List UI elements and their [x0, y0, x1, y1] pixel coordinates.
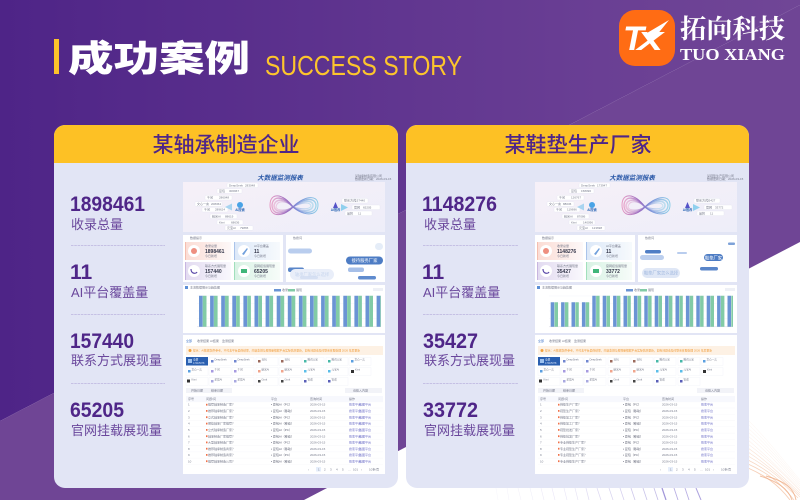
dashboard screenshot: insole manufacturer: 元宝AI	[579, 225, 588, 230]
metric: total indexed: 收录总量	[71, 217, 123, 232]
word cloud: 接待服务厂家	[352, 257, 378, 264]
dashboard screenshot: insole manufacturer: 11	[710, 211, 713, 215]
dashboard screenshot: bearing manufacturer: 某轴承制造有限公司	[355, 173, 382, 178]
results table names: 鞋垫加工厂家？	[560, 414, 581, 419]
results table names	[208, 402, 371, 463]
results table names: 轴承制造厂家推荐？	[208, 433, 235, 438]
dashboard screenshot: insole manufacturer: 联系方式	[696, 198, 708, 203]
results table names: 专业鞋垫生产厂家？	[560, 446, 587, 451]
dashboard screenshot: bearing manufacturer: 157440	[205, 269, 222, 275]
dashboard screenshot: bearing manufacturer: 千问	[204, 207, 210, 212]
dashboard screenshot: insole manufacturer: 126767	[571, 196, 581, 200]
metric: website impressions	[70, 399, 162, 438]
dashboard screenshot: insole manufacturer: 某鞋垫生产有限公司	[707, 173, 734, 178]
dashboard screenshot: insole manufacturer: 119696	[567, 208, 577, 212]
dashboard screenshot: bearing manufacturer: 65205	[363, 205, 372, 209]
logo icon	[619, 10, 675, 66]
dashboard screenshot: bearing manufacturer: 286048	[219, 196, 229, 200]
results table names: ▪ 豆包AI（PC）	[271, 452, 292, 457]
heading: title	[54, 38, 462, 81]
results table names	[560, 402, 643, 463]
dashboard screenshot: bearing manufacturer: 纳米AI	[212, 213, 221, 218]
results table names: 鞋垫批发厂家？	[560, 433, 581, 438]
dashboard screenshot: bearing manufacturer: 官网	[354, 204, 360, 209]
logo latin name: TUO XIANG	[680, 45, 785, 64]
metric: contact impressions: 联系方式展现量	[424, 353, 515, 368]
results table names: ▪ 豆包AI（移动）	[271, 433, 294, 438]
dashboard screenshot: insole manufacturer: 千问	[559, 195, 565, 200]
dashboard screenshot: bearing manufacturer: 208364	[211, 202, 221, 206]
results table names: 哪些轴承厂家推荐？	[208, 421, 235, 426]
results table names: 立式轴承制造厂家？	[208, 414, 235, 419]
dashboard screenshot: insole manufacturer: 33772	[715, 205, 724, 209]
metric: total indexed: 1898461	[70, 193, 145, 216]
results table names: ▪ 豆包AI（移动）	[271, 421, 294, 426]
metric: AI platforms: AI平台覆盖量	[71, 285, 148, 300]
metric: AI platforms	[422, 261, 500, 300]
results table names: 截图平台	[359, 421, 371, 426]
dashboard screenshot: bearing manufacturer: 大数据监测报表	[257, 174, 304, 182]
results table names: 推荐轴承制造商家？	[208, 446, 235, 451]
results table names: ▪ 豆包AI（移动）	[271, 446, 294, 451]
panel heading: 某轴承制造企业	[152, 134, 300, 157]
results table names: ▪ 豆包（PC）	[623, 440, 641, 444]
dashboard screenshot: insole manufacturer: 品牌	[699, 210, 705, 215]
dashboard screenshot: insole manufacturer: 173947	[597, 183, 607, 187]
dashboard screenshot: bearing manufacturer: 品牌	[347, 210, 353, 215]
results table names: 专业鞋垫生产厂家？	[560, 452, 587, 457]
decoration: lavender fan lines	[496, 488, 701, 500]
word cloud: 鞋垫厂家	[705, 254, 723, 261]
results table names: 专业鞋垫生产厂家？	[560, 440, 587, 444]
dashboard screenshot: insole manufacturer: 33772	[606, 269, 620, 275]
metric: AI platforms: 11	[422, 261, 445, 284]
results table names: 专业鞋垫生产厂家？	[560, 458, 587, 463]
results table names: ▪ 豆包（移动）	[623, 433, 643, 438]
results table names: ▪ 豆包（移动）	[623, 458, 643, 463]
dashboard screenshot: insole manufacturer: 1148276	[557, 249, 576, 255]
title: English: SUCCESS STORY	[265, 50, 462, 81]
title: Chinese: 成功案例	[68, 38, 250, 79]
metric: contact impressions: 157440	[70, 330, 134, 353]
metric: AI platforms	[70, 261, 148, 300]
results table names: 推荐轴承制造公司？	[208, 458, 235, 463]
metric: website impressions: 65205	[70, 399, 124, 422]
results table names: ▪ 豆包AI（PC）	[271, 402, 292, 407]
word cloud	[640, 242, 735, 278]
results table names: 截图平台	[359, 452, 371, 457]
metric: contact impressions: 联系方式展现量	[71, 353, 162, 368]
dashboard screenshot: insole manufacturer: 87086	[577, 214, 586, 218]
results table names: 截图平台	[359, 408, 371, 413]
results table names: 推荐轴承制造厂家？	[208, 402, 235, 407]
dashboard screenshot: insole manufacturer: 11	[606, 249, 612, 255]
dashboard screenshot: insole manufacturer: 140096	[583, 220, 593, 224]
dashboard screenshot: bearing manufacturer: 79865	[240, 226, 249, 230]
metric: total indexed: 收录总量	[424, 217, 476, 232]
results table names: 鞋垫批发厂家？	[560, 427, 581, 432]
word cloud	[288, 243, 383, 280]
decoration: orange flowing curves	[748, 420, 800, 500]
results table names: 大型轴承制造厂家？	[208, 440, 235, 444]
dashboard screenshot: bearing manufacturer: Kimi	[219, 220, 225, 224]
dashboard screenshot: insole manufacturer: 大数据监测报表	[609, 174, 656, 182]
dashboard screenshot: insole manufacturer: 文心一言	[549, 201, 561, 206]
results table names: 截图平台	[359, 458, 371, 463]
dashboard screenshot: insole manufacturer	[535, 173, 744, 474]
dashboard screenshot: insole manufacturer: 123698	[592, 226, 602, 230]
results table names: ▪ 豆包（移动）	[623, 421, 643, 426]
metric: contact impressions: 35427	[423, 330, 478, 353]
dashboard screenshot: bearing manufacturer: 11	[254, 249, 260, 255]
dashboard screenshot: insole manufacturer: DeepSeek	[581, 183, 596, 187]
results table names: 鞋垫加工厂家？	[560, 421, 581, 426]
dashboard screenshot: bearing manufacturer: 元宝AI	[227, 225, 236, 230]
logo icon: X	[634, 26, 665, 56]
metric: contact impressions	[423, 330, 515, 368]
panel heading: 某鞋垫生产厂家	[504, 134, 652, 157]
metric: total indexed	[70, 193, 145, 232]
dashboard screenshot: insole manufacturer: 35427	[557, 269, 571, 275]
metric: total indexed: 1148276	[422, 193, 497, 216]
results table names: ▪ 豆包（移动）	[623, 408, 643, 413]
results table names: ▪ 豆包AI（PC）	[271, 427, 292, 432]
dashboard screenshot: bearing manufacturer: 283048	[245, 183, 255, 187]
results table names: ▪ 豆包（PC）	[623, 427, 641, 432]
dashboard screenshot: bearing manufacturer: 豆包	[219, 188, 225, 193]
results table names: ▪ 豆包AI（PC）	[271, 414, 292, 419]
logo wordmark: 拓向科技	[680, 14, 785, 44]
results table names: 截图平台	[359, 414, 371, 419]
dashboard screenshot: insole manufacturer: 88036	[563, 202, 572, 206]
results table names: 立式轴承制造厂家？	[208, 427, 235, 432]
bar chart	[551, 311, 733, 314]
metric: website impressions: 官网挂载展现量	[424, 423, 515, 438]
dashboard screenshot: insole manufacturer: 千问	[556, 207, 562, 212]
metric: AI platforms: 11	[70, 261, 93, 284]
metric: contact impressions	[70, 330, 162, 368]
dashboard screenshot: bearing manufacturer	[183, 173, 392, 474]
dashboard screenshot: bearing manufacturer: 数据更新日期：2026-03-15	[355, 176, 392, 181]
dashboard screenshot: bearing manufacturer: 289624	[215, 208, 225, 212]
dashboard screenshot: insole manufacturer: Kimi	[571, 220, 577, 224]
results table names: 截图平台	[359, 402, 371, 407]
word cloud: 鞋垫厂家怎么选择	[644, 270, 679, 276]
dashboard screenshot: bearing manufacturer: 11	[358, 211, 361, 215]
results table names: ▪ 豆包（PC）	[623, 414, 641, 419]
word cloud: 轴承厂家怎么选择	[295, 271, 330, 278]
results table names: ▪ 豆包AI（移动）	[271, 458, 294, 463]
dashboard screenshot: insole manufacturer: 豆包	[571, 188, 577, 193]
results table names: 截图平台	[359, 433, 371, 438]
dashboard screenshot: insole manufacturer: 35427	[707, 199, 716, 203]
results table names: 鞋垫生产厂家？	[560, 402, 581, 407]
panel: insole manufacturer	[406, 125, 749, 488]
dashboard screenshot: insole manufacturer: 纳米AI	[564, 213, 573, 218]
logo icon: T	[623, 20, 647, 58]
logo	[619, 10, 785, 66]
results table names: 截图平台	[359, 440, 371, 444]
bar chart	[199, 296, 381, 327]
dashboard screenshot: bearing manufacturer: 文心一言	[197, 201, 209, 206]
results table names: 推荐轴承制造厂家？	[208, 408, 235, 413]
dashboard screenshot: insole manufacturer: 官网	[706, 204, 712, 209]
metric: website impressions: 官网挂载展现量	[71, 423, 162, 438]
metric: total indexed	[422, 193, 497, 232]
results table names: ▪ 豆包AI（移动）	[271, 408, 294, 413]
dashboard screenshot: bearing manufacturer: 157440	[355, 199, 365, 203]
metric: website impressions: 33772	[423, 399, 478, 422]
results table names: ▪ 豆包（移动）	[623, 446, 643, 451]
dashboard screenshot: bearing manufacturer: 68636	[231, 220, 240, 224]
dashboard screenshot: bearing manufacturer: 千问	[207, 195, 213, 200]
panel: bearing manufacturer	[54, 125, 398, 488]
results table names: 截图平台	[359, 427, 371, 432]
dashboard screenshot: bearing manufacturer: 1898461	[205, 249, 225, 255]
dashboard screenshot: insole manufacturer: 数据更新日期：2026-03-15	[707, 176, 744, 181]
results table names: ▪ 豆包（PC）	[623, 402, 641, 407]
results table names: 推荐轴承制造商家？	[208, 452, 235, 457]
metric: AI platforms: AI平台覆盖量	[423, 285, 500, 300]
dashboard screenshot: bearing manufacturer: 联系方式	[344, 198, 356, 203]
dashboard screenshot: bearing manufacturer: 88619	[225, 214, 234, 218]
dashboard screenshot: bearing manufacturer: DeepSeek	[229, 183, 244, 187]
dashboard screenshot: insole manufacturer: 158096	[581, 189, 591, 193]
results table names: ▪ 豆包AI（PC）	[271, 440, 292, 444]
results table names: 鞋垫生产厂家？	[560, 408, 581, 413]
dashboard screenshot: bearing manufacturer: 65205	[254, 269, 268, 275]
metric: website impressions	[423, 399, 515, 438]
results table names: 截图平台	[359, 446, 371, 451]
accent bar	[54, 39, 59, 74]
results table names: ▪ 豆包（PC）	[623, 452, 641, 457]
dashboard screenshot: bearing manufacturer: 306967	[229, 189, 239, 193]
